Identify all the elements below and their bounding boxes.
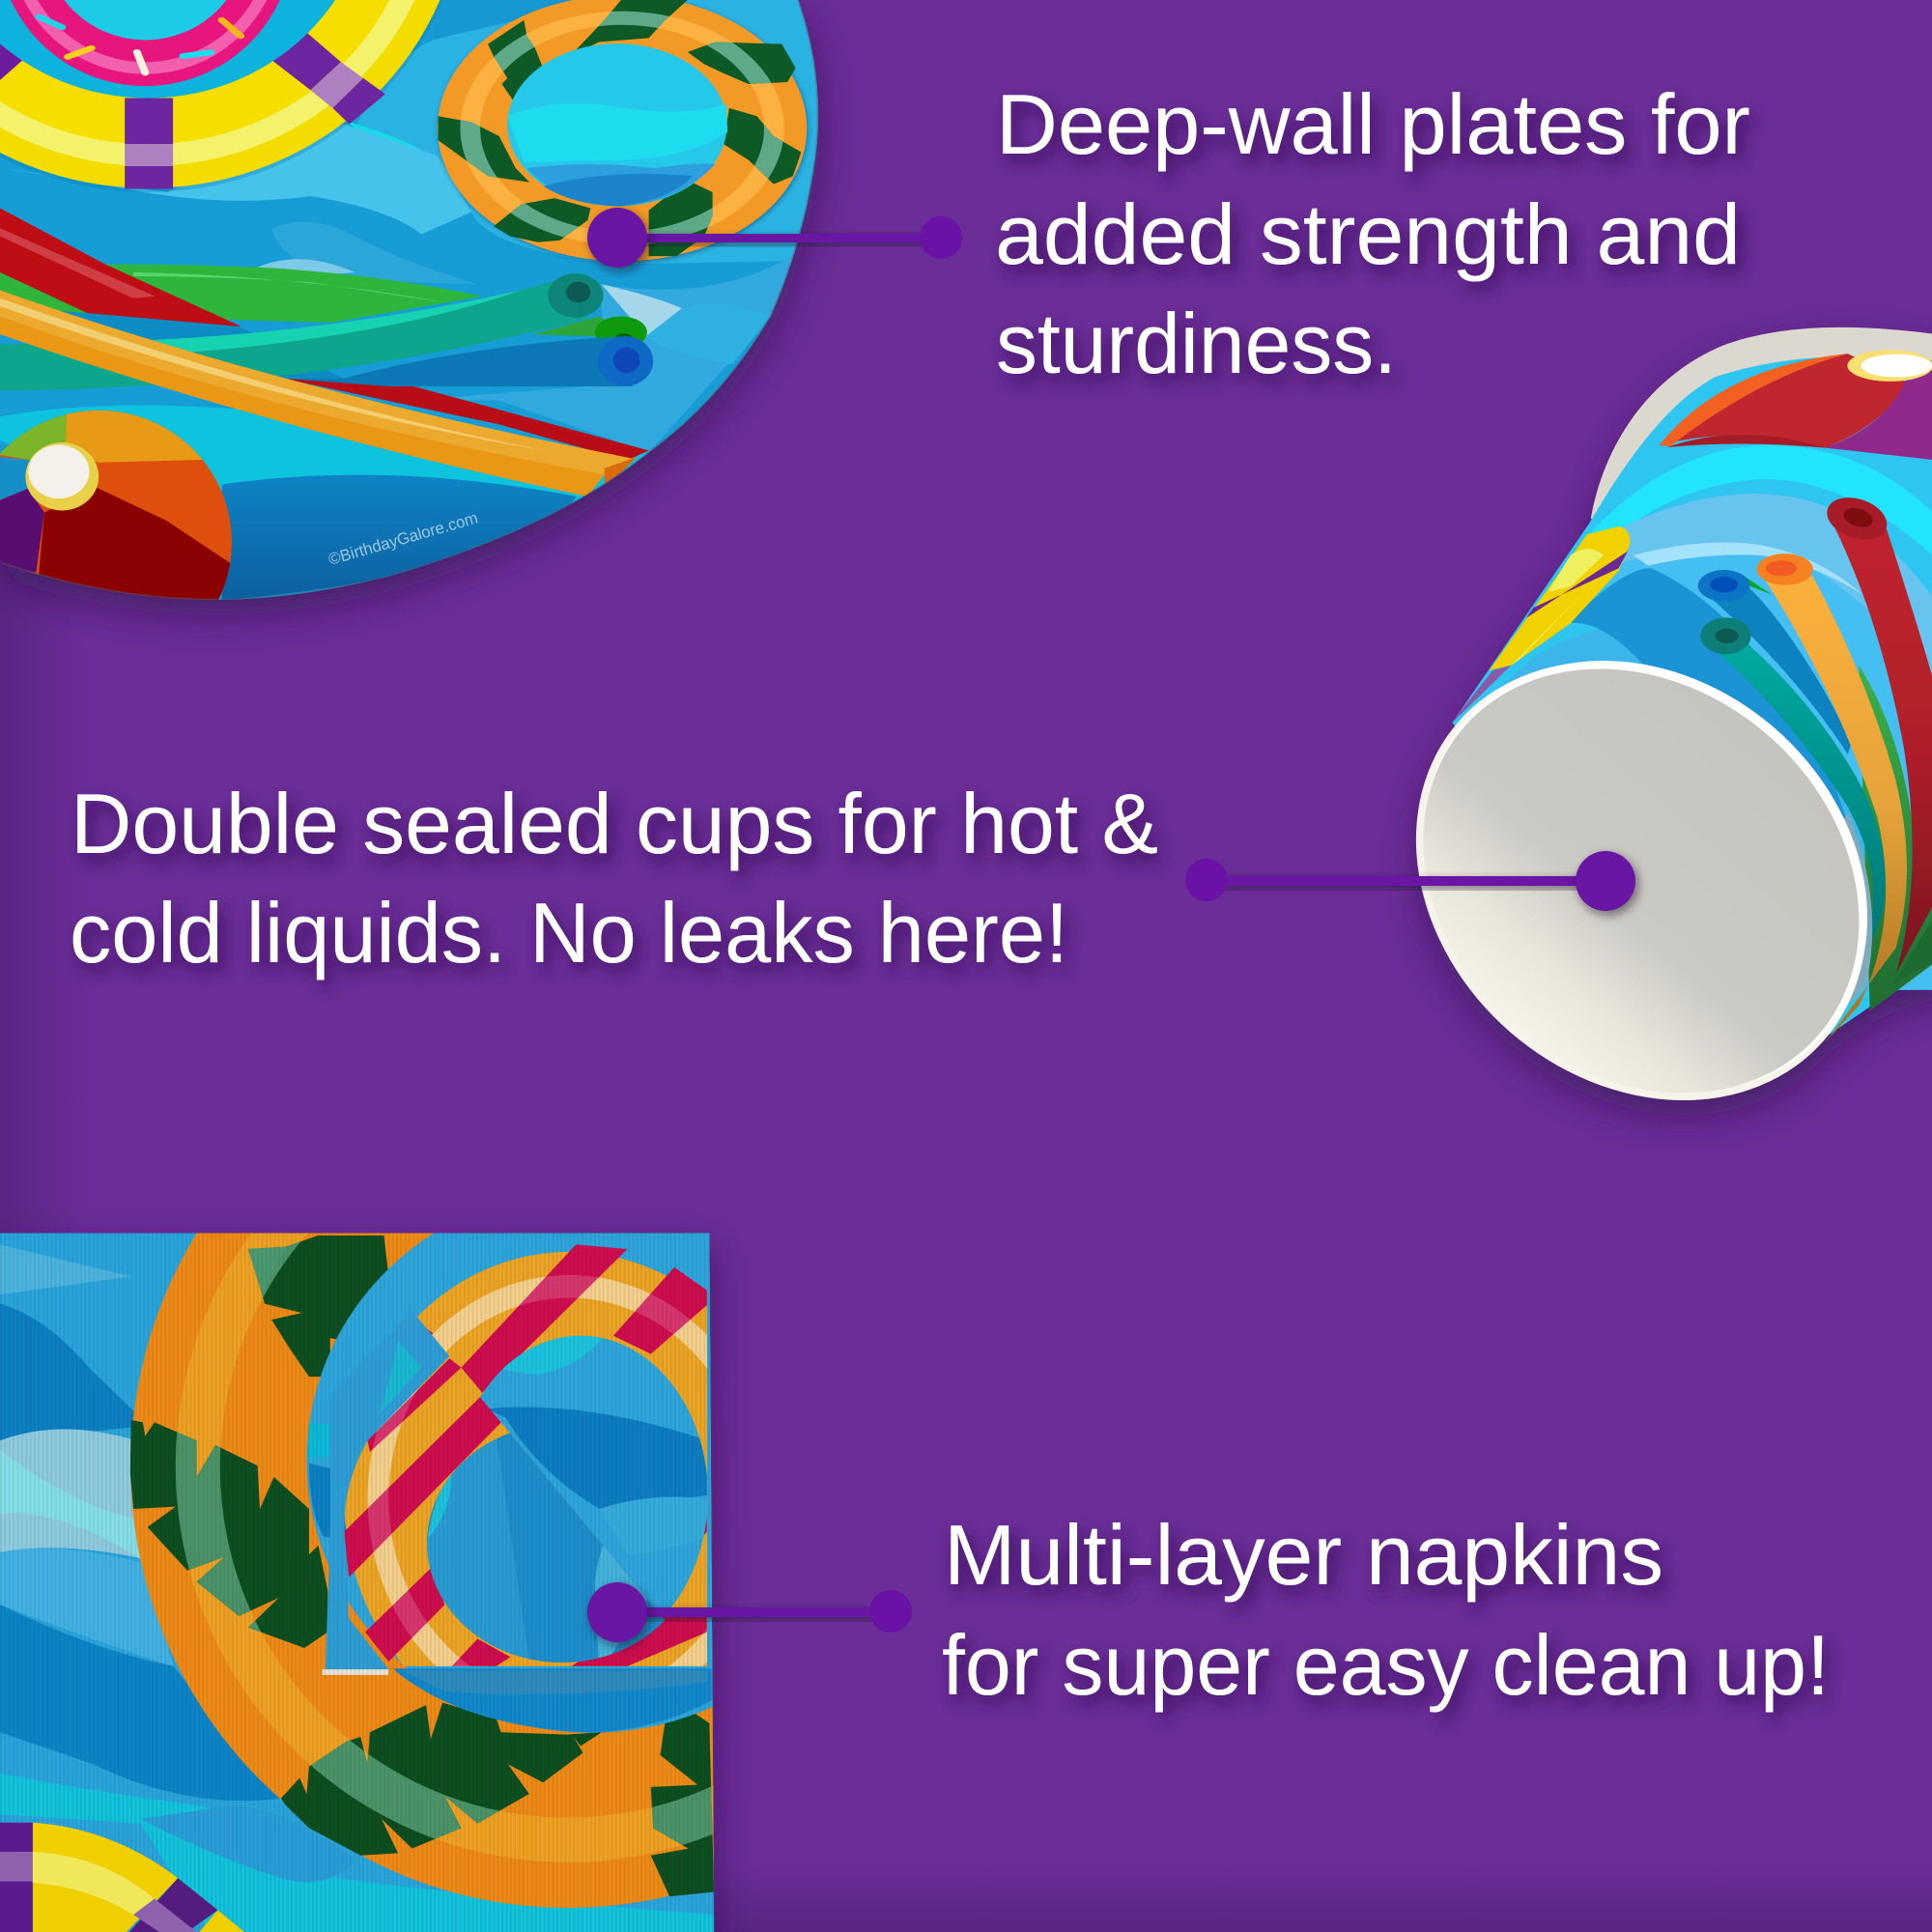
text block: cups: Double sealed cups for hot &	[71, 776, 1158, 871]
cup rim	[1591, 327, 1932, 519]
text block: plates: Deep-wall plates for	[996, 76, 1750, 172]
text block: plates: added strength and	[995, 186, 1741, 282]
pool noodles on plate	[0, 209, 653, 497]
yellow ring on cup	[1452, 526, 1630, 723]
panel: paper cup	[1327, 327, 1932, 1191]
pool noodles on cup	[1698, 492, 1932, 1042]
plate rim	[0, 0, 818, 600]
connector: cup callout	[1185, 851, 1635, 911]
ring hole water	[306, 1233, 713, 1733]
napkin ribbing texture	[0, 1234, 717, 1932]
second yellow ring on napkin	[0, 1823, 248, 1932]
text block: cups	[70, 776, 1158, 980]
beach ball	[0, 410, 232, 601]
cup body	[1452, 356, 1932, 1042]
beach ball on cup	[1660, 350, 1932, 461]
plate anchor dot	[587, 208, 647, 268]
text block: napkins: Multi-layer napkins	[944, 1507, 1663, 1603]
cup base disc	[1327, 571, 1932, 1191]
plate watermark: ©BirthdayGalore.com	[327, 508, 480, 569]
pink donut float	[0, 0, 294, 86]
napkin water background	[0, 1234, 717, 1932]
cup end dot	[1185, 859, 1228, 901]
napkin end dot	[869, 1590, 912, 1633]
napkin anchor dot	[587, 1582, 647, 1642]
text block: plates	[995, 76, 1750, 391]
plate water background	[0, 0, 832, 605]
lower folded hole	[427, 1434, 665, 1663]
plate end dot	[920, 216, 962, 259]
upper hole	[480, 1335, 707, 1607]
panel: plate photo	[0, 0, 832, 677]
text block: napkins	[942, 1507, 1830, 1713]
folded napkin edge	[322, 1311, 449, 1675]
big orange palm ring	[129, 1233, 716, 1911]
yellow swim ring	[0, 0, 467, 192]
connector: napkin callout	[587, 1582, 912, 1642]
panel: napkin	[0, 1233, 730, 1932]
orange palm ring	[433, 0, 810, 265]
connector: plate callout	[587, 208, 962, 268]
text block: plates: sturdiness.	[996, 296, 1397, 391]
text block: cups: cold liquids. No leaks here!	[70, 885, 1068, 980]
text block: napkins: for super easy clean up!	[942, 1617, 1830, 1713]
candy-striped ring	[344, 1244, 707, 1666]
cup anchor dot	[1576, 851, 1635, 911]
